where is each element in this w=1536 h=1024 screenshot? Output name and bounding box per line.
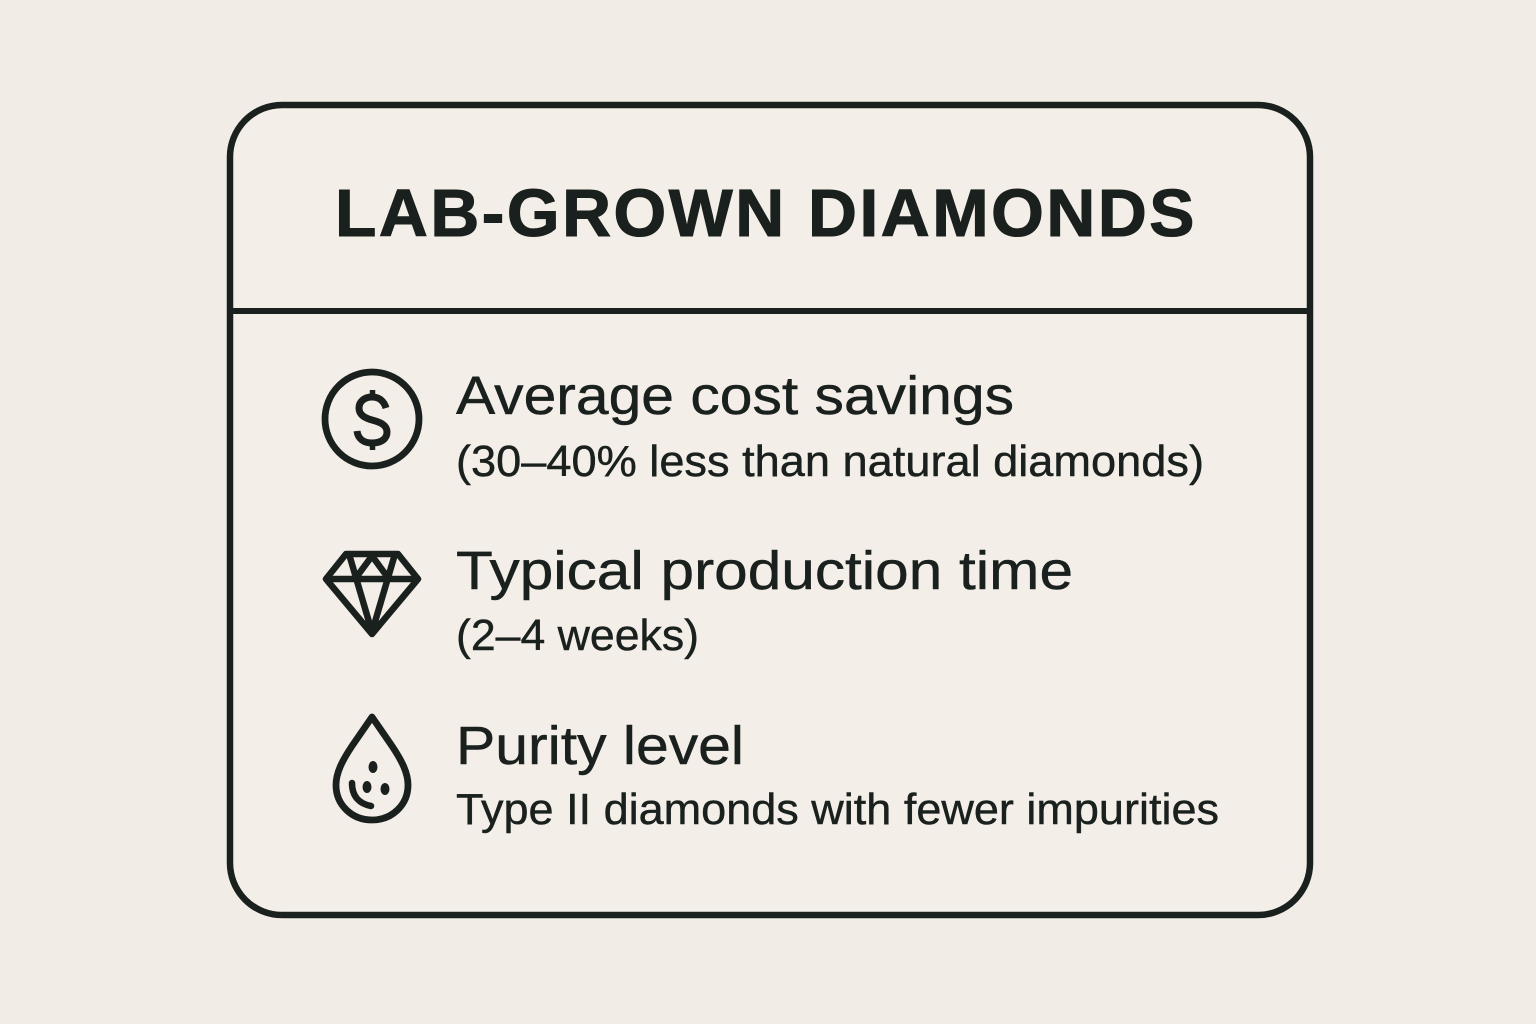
detail: production time: (2–4 weeks)	[456, 611, 699, 660]
icon: droplet	[336, 717, 408, 820]
icon: dollar coin	[325, 372, 419, 466]
row: cost savings	[325, 366, 1204, 486]
header divider	[230, 308, 1310, 314]
detail: cost savings: (30–40% less than natural diamonds)	[456, 437, 1204, 486]
heading: purity level: Purity level	[456, 716, 744, 776]
heading: typical production time: Typical production time	[456, 541, 1073, 601]
row: purity level	[336, 716, 1219, 834]
detail: purity level: Type II diamonds with fewer impurities	[456, 785, 1219, 834]
panel: card	[230, 105, 1310, 915]
row: production time	[326, 541, 1073, 660]
icon: diamond	[326, 554, 418, 634]
title: LAB-GROWN DIAMONDS	[335, 176, 1197, 251]
heading: average cost savings: Average cost savings	[456, 366, 1014, 426]
